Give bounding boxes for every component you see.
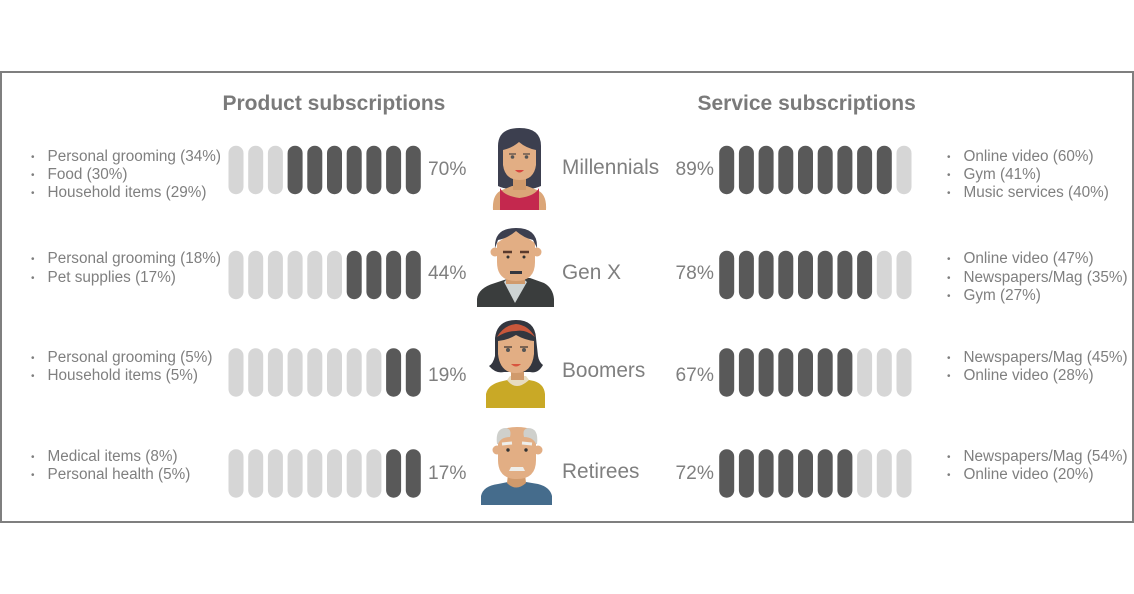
list: gen x services: •	[947, 254, 951, 265]
list: millennials products: Personal grooming (34%)	[48, 148, 221, 165]
bars: retirees services 72%	[719, 449, 912, 498]
value: 72%: 72%	[676, 463, 714, 484]
bars: gen x services 78%	[719, 251, 912, 299]
list: boomers services: Newspapers/Mag (45%)	[964, 349, 1128, 366]
list: millennials services: Gym (41%)	[964, 166, 1041, 183]
list: millennials services: •	[947, 170, 951, 181]
list: boomers products: Personal grooming (5%)	[48, 349, 212, 366]
list: millennials services: Music services (40%)	[964, 184, 1109, 201]
bars: retirees products 17%	[228, 449, 421, 498]
label: Boomers: Boomers	[562, 359, 645, 382]
list: retirees products	[31, 448, 190, 483]
list: millennials products: •	[31, 188, 35, 199]
list: millennials services	[947, 148, 1109, 201]
list: gen x services: Newspapers/Mag (35%)	[964, 269, 1128, 286]
value: 70%: 70%	[428, 159, 466, 180]
list: gen x products: Personal grooming (18%)	[48, 250, 221, 267]
list: millennials services: •	[947, 152, 951, 163]
list: gen x services: •	[947, 273, 951, 284]
list: retirees services: •	[947, 452, 951, 463]
list: boomers products: Household items (5%)	[48, 367, 198, 384]
bars: boomers services 67%	[719, 348, 912, 397]
icon: millennial woman	[493, 128, 546, 210]
value: 17%: 17%	[428, 463, 466, 484]
list: millennials products: Food (30%)	[48, 166, 127, 183]
outer frame	[1, 72, 1133, 522]
heading: product subscriptions: Product subscriptions	[222, 92, 445, 115]
list: retirees products: Medical items (8%)	[48, 448, 178, 465]
list: gen x services: Gym (27%)	[964, 287, 1041, 304]
list: retirees products: •	[31, 470, 35, 481]
list: gen x services	[947, 250, 1128, 304]
list: millennials products: •	[31, 170, 35, 181]
list: boomers products: •	[31, 371, 35, 382]
value: 89%: 89%	[676, 159, 714, 180]
list: boomers services	[947, 349, 1128, 384]
bars: boomers products 19%	[228, 348, 421, 397]
list: boomers products	[31, 349, 212, 384]
list: gen x services: •	[947, 291, 951, 302]
label: Gen X: Gen X	[562, 261, 621, 284]
value: 19%: 19%	[428, 365, 466, 386]
list: millennials products	[31, 148, 221, 201]
value: 78%: 78%	[676, 263, 714, 284]
list: retirees products: Personal health (5%)	[48, 466, 190, 483]
icon: gen x man	[477, 228, 554, 307]
list: boomers products: •	[31, 353, 35, 364]
list: millennials products: Household items (29%)	[48, 184, 206, 201]
label: Retirees: Retirees	[562, 460, 639, 483]
label: Millennials: Millennials	[562, 156, 659, 179]
list: gen x services: Online video (47%)	[964, 250, 1094, 267]
list: gen x products: •	[31, 254, 35, 265]
list: gen x products	[31, 250, 221, 286]
list: boomers services: •	[947, 353, 951, 364]
bars: millennials services 89%	[719, 146, 912, 194]
list: retirees services: Online video (20%)	[964, 466, 1094, 483]
list: millennials products: •	[31, 152, 35, 163]
list: boomers services: •	[947, 371, 951, 382]
list: gen x products: Pet supplies (17%)	[48, 269, 176, 286]
value: 44%: 44%	[428, 263, 466, 284]
list: millennials services: Online video (60%)	[964, 148, 1094, 165]
list: retirees products: •	[31, 452, 35, 463]
list: boomers services: Online video (28%)	[964, 367, 1094, 384]
bars: gen x products 44%	[228, 251, 421, 299]
icon: boomer woman	[486, 320, 545, 408]
list: millennials services: •	[947, 188, 951, 199]
list: gen x products: •	[31, 273, 35, 284]
list: retirees services: •	[947, 470, 951, 481]
heading: service subscriptions: Service subscriptions	[698, 92, 916, 115]
icon: retiree man	[481, 427, 552, 505]
list: retirees services	[947, 448, 1128, 483]
list: retirees services: Newspapers/Mag (54%)	[964, 448, 1128, 465]
value: 67%: 67%	[676, 365, 714, 386]
bars: millennials products 70%	[228, 146, 421, 194]
